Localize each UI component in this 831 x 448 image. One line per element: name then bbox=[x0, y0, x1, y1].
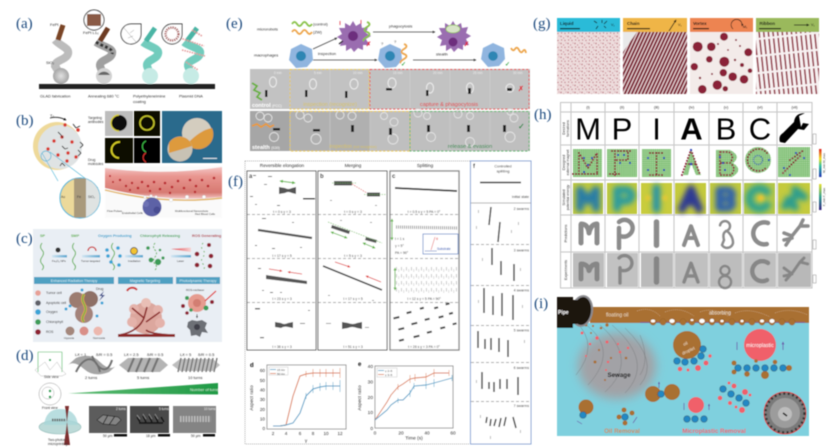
two-photon printing bbox=[39, 406, 81, 446]
helix: 5 turns: δ/R = 0.5 bbox=[147, 352, 164, 357]
chart d: aspect ratio vs gamma: 50 bbox=[260, 378, 265, 383]
chart d: aspect ratio vs gamma: d bbox=[250, 363, 254, 369]
label a: (a) bbox=[16, 16, 33, 32]
top schematic labels: phagocytosis bbox=[389, 24, 412, 28]
subpanel a: reversible elongation: t = 0 s γ = 3 bbox=[273, 210, 291, 214]
row: desired formations: M bbox=[575, 112, 601, 146]
schematic arrows bbox=[313, 32, 476, 60]
chart e: aspect ratio vs time: γ 2–5 bbox=[385, 369, 393, 373]
phagocytic macrophage with control robot bbox=[337, 20, 371, 52]
helix: 5 turns bbox=[119, 352, 168, 380]
panel: (a) helical microrobot fabrication bbox=[16, 10, 215, 104]
panel: (h) programmable swarm patterns table bbox=[534, 102, 826, 288]
subpanel c: splitting: t = 1 s bbox=[395, 237, 405, 241]
top schematic labels bbox=[254, 22, 448, 58]
photodynamic cells: ROS-mic/laser bbox=[186, 288, 204, 292]
blue therapy headers: Enhanced Radiation Therapy bbox=[51, 279, 97, 283]
helix: 2 turns: δ/R = 0.5 bbox=[96, 352, 113, 357]
subpanel c: splitting: γ = 5° bbox=[395, 244, 404, 248]
column headers bbox=[586, 106, 798, 110]
scale bars bbox=[103, 434, 215, 438]
column headers: (vii) bbox=[791, 106, 798, 110]
chain mode: Chain bbox=[627, 21, 640, 26]
absorbing robots row bbox=[640, 319, 805, 325]
sewage pipe: Pipe bbox=[558, 310, 569, 316]
Janus sphere schematic: molecules bbox=[88, 162, 104, 166]
microscopy strip: control: 30 min bbox=[513, 71, 523, 75]
helix: 5 turns: L/t = 2.5 bbox=[124, 352, 139, 357]
liquid mode: V₁ bbox=[611, 23, 615, 27]
row labels: Desired bbox=[562, 122, 566, 135]
radiation tumor cluster: Normoxia bbox=[93, 336, 105, 340]
number of turns wedge: Number of turns bbox=[190, 387, 219, 392]
microscopy strip: stealth bbox=[250, 109, 530, 151]
captions: GLAD fabrication bbox=[40, 94, 70, 98]
column headers: Reversible elongation bbox=[260, 163, 305, 168]
helix: 10 turns: δ/R = 0.5 bbox=[198, 352, 215, 357]
side view diagram bbox=[35, 352, 66, 379]
subpanel f: controlled splitting: Controlled bbox=[494, 164, 512, 168]
label i: (i) bbox=[534, 296, 548, 312]
robot: annealing: FePt L1₀ bbox=[83, 30, 99, 35]
subpanel a: reversible elongation bbox=[247, 171, 316, 350]
microscopy strip: stealth: ✓ bbox=[518, 122, 525, 131]
inspecting macrophage with ZW robot: ✓ bbox=[401, 62, 406, 68]
ribbon mode bbox=[756, 18, 819, 94]
dotted frame bbox=[245, 161, 470, 444]
blood vessel illustration: Multifunctional Nanorobots bbox=[175, 209, 209, 213]
vortex mode: Vortex bbox=[693, 21, 707, 26]
Janus sphere schematic: T₀ bbox=[50, 113, 54, 118]
Janus sphere schematic bbox=[33, 113, 104, 170]
row: predicted swarm shapes bbox=[581, 220, 808, 248]
microscopy strip: control: 5 min bbox=[314, 71, 322, 75]
chart d: aspect ratio vs gamma bbox=[249, 363, 346, 443]
column headers: Merging bbox=[345, 163, 362, 168]
process arrows: Laser bbox=[177, 259, 184, 263]
captions: Polyethyleneimine bbox=[133, 94, 166, 98]
radiation tumor cluster: Hypoxia bbox=[64, 336, 75, 340]
subpanel c: splitting: c bbox=[392, 174, 396, 180]
row labels: formations bbox=[566, 120, 570, 137]
column headers: Splitting bbox=[417, 163, 434, 168]
section captions: Oil Removal bbox=[604, 428, 640, 435]
top row headings bbox=[40, 234, 222, 238]
row labels: external magnet bbox=[566, 150, 570, 175]
blue therapy headers: Photodynamic Therapy bbox=[180, 279, 217, 283]
subpanel f: controlled splitting: 5 swarms bbox=[514, 328, 529, 332]
legend: Apoptotic cell bbox=[46, 301, 66, 305]
chain mode: V₁ bbox=[678, 23, 682, 27]
microrobot waves bbox=[292, 22, 312, 34]
microplastic capture bbox=[732, 329, 792, 379]
zoom circle of layers bbox=[41, 151, 100, 218]
panel: (i) oil and microplastic removal bbox=[534, 295, 809, 436]
microscopy strip: control: 10 min bbox=[353, 71, 363, 75]
chart d: aspect ratio vs gamma: 2 bbox=[272, 431, 275, 436]
macrophage bbox=[289, 44, 313, 68]
zoom circle of layers: SiO₂ bbox=[88, 195, 96, 199]
microscopy strip: stealth: inspection (not recognize) bbox=[329, 144, 377, 150]
chart e: aspect ratio vs time: 60 bbox=[450, 430, 456, 436]
subpanel f: controlled splitting: 7 swarms bbox=[514, 404, 529, 408]
subpanel a: reversible elongation: t = 17 s γ = 5 bbox=[272, 254, 292, 258]
microscopy strip: control bbox=[250, 69, 530, 109]
top schematic labels: macrophages bbox=[254, 52, 278, 58]
subpanel f: controlled splitting bbox=[470, 161, 531, 444]
chart d: aspect ratio vs gamma: 60 bbox=[260, 368, 265, 373]
process arrows: Irradiation bbox=[128, 259, 141, 263]
subpanel f: controlled splitting: f bbox=[473, 164, 476, 170]
subpanel b: merging: b bbox=[320, 174, 324, 180]
photodynamic cells bbox=[181, 288, 216, 337]
ribbon mode: V₁ bbox=[811, 23, 815, 27]
subpanel f: controlled splitting: 3 swarms bbox=[514, 248, 529, 252]
chart e: aspect ratio vs time: 0 bbox=[370, 426, 373, 432]
engulfed robot macrophage: ✗ bbox=[464, 41, 469, 48]
helix: 2 turns: 2 turns bbox=[85, 375, 97, 380]
helix: 2 turns: L/t = 1 bbox=[75, 352, 87, 357]
two-photon printing: Two-photon bbox=[48, 438, 66, 442]
column headers: (v) bbox=[724, 106, 729, 110]
blue therapy headers bbox=[34, 277, 220, 284]
inspecting macrophage with ZW robot: ? bbox=[394, 39, 397, 44]
legend: Tumor cell bbox=[46, 291, 62, 295]
row labels: Simulated bbox=[562, 190, 566, 205]
chart e: aspect ratio vs time: γ 3–5 bbox=[385, 373, 393, 377]
sewage pipe bbox=[557, 295, 594, 328]
chart d: aspect ratio vs gamma: 12 bbox=[337, 431, 343, 436]
column headers bbox=[260, 163, 434, 168]
chart e: aspect ratio vs time: Time (s) bbox=[405, 436, 423, 442]
subpanel c: splitting: PA = 90° bbox=[395, 251, 409, 255]
chart d: aspect ratio vs gamma: 10 bbox=[260, 416, 265, 422]
chart e: aspect ratio vs time: 0 bbox=[374, 430, 377, 436]
blood vessel illustration: Endothelial Cells bbox=[122, 211, 143, 215]
scale bars: 50 μm bbox=[103, 434, 113, 438]
vortex mode bbox=[690, 18, 753, 94]
chart e: aspect ratio vs time: 30 bbox=[368, 380, 373, 386]
top row headings: Chlorophyll Releasing bbox=[140, 234, 181, 238]
subpanel f: controlled splitting: 6 swarms bbox=[514, 366, 529, 370]
chart d: aspect ratio vs gamma: 30 bbox=[260, 397, 265, 402]
helix: 2 turns bbox=[68, 352, 117, 380]
blue therapy headers: Magnetic Targeting bbox=[130, 279, 160, 283]
chart d: aspect ratio vs gamma: 8 bbox=[312, 431, 315, 436]
chart e: aspect ratio vs time: 10 bbox=[368, 410, 373, 416]
subpanel a: reversible elongation: t = 23 s γ = 3 bbox=[272, 297, 292, 301]
number of turns wedge bbox=[68, 383, 219, 394]
row: desired formations: B bbox=[716, 112, 736, 146]
label h: (h) bbox=[534, 107, 552, 123]
panel: (d) helical swimmers with varied turns bbox=[16, 348, 220, 446]
top row headings: ROS Generating bbox=[192, 234, 222, 238]
SEM of Janus spheres bbox=[162, 111, 222, 163]
label d: (d) bbox=[16, 348, 34, 364]
chart d: aspect ratio vs gamma: 15 Hz bbox=[277, 368, 285, 372]
oil droplet capture bbox=[673, 331, 712, 372]
process arrows: Tumor-targeted bbox=[81, 259, 101, 263]
robot: plasmid DNA bbox=[162, 24, 205, 84]
chart d: aspect ratio vs gamma: 6 bbox=[299, 431, 302, 436]
oil droplet capture: oil bbox=[682, 340, 688, 347]
row labels: Designed bbox=[562, 155, 566, 170]
helix: 10 turns bbox=[172, 352, 220, 380]
microscopy strip: control: ✗ bbox=[518, 85, 524, 93]
row: desired formations: I bbox=[652, 112, 661, 146]
chain mode bbox=[623, 18, 687, 94]
panel: (b) Janus particle drug delivery bbox=[16, 111, 222, 218]
released macrophage: ✓ bbox=[505, 62, 510, 68]
chart e: aspect ratio vs time bbox=[357, 362, 456, 442]
subpanel f: controlled splitting: splitting bbox=[497, 170, 509, 174]
captions: coating bbox=[133, 99, 146, 104]
liquid mode bbox=[557, 18, 620, 94]
row labels: potential energy bbox=[566, 185, 570, 210]
row: simulated potential energy bbox=[573, 183, 810, 214]
captions: Annealing 680 °C bbox=[88, 94, 119, 98]
subpanel f: controlled splitting: initial state bbox=[512, 195, 529, 199]
blood vessel illustration: Flow Pulses bbox=[107, 209, 123, 213]
label e: (e) bbox=[226, 16, 243, 32]
row: desired formations: C bbox=[749, 112, 771, 146]
Janus sphere schematic: Targeting bbox=[88, 116, 102, 120]
panel: (f) swarm reconfiguration bbox=[228, 161, 531, 444]
phagocytic macrophage with control robot: ✗ bbox=[366, 41, 371, 48]
scale bars: 50 μm bbox=[191, 434, 201, 438]
section captions bbox=[604, 428, 746, 435]
label g: (g) bbox=[533, 16, 550, 32]
microscopy strip: control: 0 min bbox=[274, 71, 282, 75]
column headers: (iv) bbox=[689, 106, 695, 110]
top schematic labels: inspection bbox=[318, 51, 336, 56]
engulfed robot macrophage bbox=[437, 21, 471, 52]
two-photon printing: microprinting bbox=[48, 442, 68, 446]
radiation tumor cluster: Drug bbox=[96, 287, 103, 291]
top schematic labels: (ZW) bbox=[313, 30, 323, 34]
floating oil band: floating oil bbox=[606, 312, 629, 318]
SEM images bbox=[89, 406, 216, 433]
inspecting macrophage with ZW robot: ? bbox=[381, 41, 384, 46]
inspecting macrophage with ZW robot bbox=[378, 39, 406, 68]
SEM inset bbox=[764, 392, 806, 434]
sewage plume bbox=[576, 322, 656, 399]
subpanel c: splitting: t = 12 s γ = 5 PA = 90° bbox=[407, 297, 441, 301]
chart e: aspect ratio vs time: 20 bbox=[368, 395, 373, 401]
column headers: (iii) bbox=[654, 106, 660, 110]
helix: 10 turns: 10 turns bbox=[188, 375, 202, 380]
subpanel f: controlled splitting: 2 swarms bbox=[514, 207, 529, 211]
chart d: aspect ratio vs gamma: 20 bbox=[260, 407, 265, 412]
subpanel a: reversible elongation: t = 36 s γ = 3 bbox=[272, 345, 292, 349]
process arrows: Fe₃O₄ NPs bbox=[52, 259, 66, 263]
water background bbox=[557, 323, 809, 436]
microscopy strip: control: 15 min bbox=[393, 71, 403, 75]
process arrows bbox=[52, 247, 191, 263]
sewage plume: Sewage bbox=[607, 372, 631, 379]
chart d: aspect ratio vs gamma: 40 bbox=[260, 388, 265, 392]
microscopy strip: stealth: stealth (S30) bbox=[252, 145, 280, 151]
side view diagram: Side view bbox=[44, 375, 59, 379]
table grid bbox=[560, 102, 812, 288]
row: designed magnet arrays bbox=[573, 147, 810, 177]
panel: (g) magnetic collective modes bbox=[533, 16, 819, 94]
chart e: aspect ratio vs time: 20 bbox=[398, 430, 404, 436]
panel: (e) macrophage stealth microrobots bbox=[226, 16, 530, 151]
subpanel c: splitting: t = 0.5 s γ = 5 PA = 0° bbox=[408, 210, 441, 214]
floating oil band: absorbing bbox=[709, 310, 731, 316]
chart e: aspect ratio vs time: e bbox=[358, 362, 362, 368]
top row headings: SMP bbox=[71, 234, 80, 238]
SEM images: 5 turns bbox=[159, 407, 169, 411]
legend: ROS bbox=[46, 330, 54, 334]
column headers: (i) bbox=[586, 106, 590, 110]
top schematic labels: (control) bbox=[313, 22, 328, 26]
row: desired formations bbox=[575, 112, 809, 146]
legend bbox=[35, 290, 66, 335]
subpanel b: merging bbox=[318, 171, 387, 350]
subpanel c: splitting: θ bbox=[436, 237, 438, 241]
oxygen, chlorophyll and ROS dots bbox=[105, 243, 213, 268]
chart d: aspect ratio vs gamma: γ bbox=[305, 438, 308, 443]
legend: Chlorophyll bbox=[46, 320, 63, 324]
subpanel c: splitting: Substrate bbox=[437, 247, 451, 251]
subpanel b: merging: t = 51 s γ = 3 bbox=[343, 345, 363, 349]
robot: GLAD fabrication bbox=[46, 22, 69, 84]
microscopy strip: control: capture & phagocytosis bbox=[420, 102, 478, 108]
robot: GLAD fabrication: FePt bbox=[50, 22, 59, 27]
microscopy strip: stealth: release & evasion bbox=[448, 144, 492, 150]
subpanel b: merging: t = 17 s γ = 5 bbox=[343, 297, 363, 301]
robot: GLAD fabrication: SiO₂ bbox=[46, 60, 55, 65]
fluorescence images bbox=[105, 111, 160, 163]
subpanel c: splitting: t = 26 s γ = 3 PA = 0° bbox=[408, 345, 441, 349]
label c: (c) bbox=[16, 231, 33, 247]
column headers: (vi) bbox=[757, 106, 763, 110]
vortex mode: M₁ bbox=[743, 25, 748, 29]
chart e: aspect ratio vs time: 40 bbox=[368, 364, 373, 370]
row labels: Experiments bbox=[564, 260, 568, 280]
chart d: aspect ratio vs gamma: 4 bbox=[285, 431, 288, 436]
chart e: aspect ratio vs time: 40 bbox=[424, 430, 430, 436]
chart d: aspect ratio vs gamma: 0 bbox=[262, 426, 265, 431]
captions bbox=[40, 94, 203, 104]
row: experimental swarm shapes bbox=[573, 253, 811, 288]
chart d: aspect ratio vs gamma: 50 Hz bbox=[277, 372, 285, 376]
side scale bars and colorbars bbox=[813, 134, 826, 283]
subpanel b: merging: t = 0 s γ = 3 bbox=[344, 210, 362, 214]
substrate bar bbox=[39, 84, 215, 89]
microscopy strip: control: inspection (recognize) bbox=[303, 102, 357, 108]
row: desired formations: P bbox=[612, 112, 632, 146]
label f: (f) bbox=[228, 174, 243, 190]
oil droplet capture: droplet bbox=[681, 345, 696, 356]
blood vessel illustration: Red Blood Cells bbox=[195, 212, 216, 216]
spirulina stages bbox=[40, 243, 204, 270]
subpanel f: controlled splitting: 4 swarms bbox=[514, 288, 529, 292]
panel: (c) chlorophyll nanoparticle therapy bbox=[16, 229, 222, 342]
SEM images: 2 turns bbox=[116, 407, 126, 411]
helix: 5 turns: 5 turns bbox=[137, 375, 149, 380]
side scale bars and colorbars: M_min M_max bbox=[822, 153, 826, 173]
chart d: aspect ratio vs gamma: 10 bbox=[323, 431, 329, 436]
top row headings: SP bbox=[40, 234, 46, 238]
microscopy strip: control: control (FCC) bbox=[252, 103, 282, 109]
microscopy strip: control: 25 min bbox=[473, 71, 483, 75]
top schematic labels: stealth bbox=[436, 52, 448, 56]
front view diagram: Front view bbox=[42, 406, 58, 410]
robot: polyethyleneimine coating bbox=[121, 24, 158, 84]
subpanel b: merging: t = 5 s γ = 3 bbox=[344, 254, 362, 258]
floating oil band bbox=[590, 307, 809, 323]
row: desired formations: A bbox=[680, 112, 703, 146]
row labels bbox=[562, 120, 570, 280]
ribbon mode: Ribbon bbox=[760, 21, 775, 26]
Janus sphere schematic: antibodies bbox=[88, 120, 104, 124]
blood vessel illustration bbox=[105, 166, 222, 218]
liquid mode: Liquid bbox=[560, 21, 574, 26]
captions: Plasmid DNA bbox=[179, 94, 203, 98]
label b: (b) bbox=[16, 113, 34, 129]
robot: annealing bbox=[83, 10, 112, 84]
Janus sphere schematic: Drug bbox=[88, 158, 95, 162]
released macrophage bbox=[481, 43, 526, 68]
magnetic targeting tumor tree bbox=[118, 288, 175, 337]
radiation tumor cluster bbox=[64, 287, 105, 340]
top schematic labels: microrobots bbox=[257, 26, 278, 32]
scale bars: 18 μm bbox=[146, 434, 156, 438]
zoom circle of layers: Fe bbox=[77, 195, 81, 199]
chart d: aspect ratio vs gamma: Aspect ratio bbox=[249, 385, 255, 411]
subpanel a: reversible elongation: a bbox=[249, 174, 253, 180]
subpanel c: splitting bbox=[390, 171, 459, 350]
microscopy strip: control: 20 min bbox=[433, 71, 443, 75]
microplastic removal examples bbox=[684, 382, 752, 422]
helix: 10 turns: L/t = 5 bbox=[180, 352, 192, 357]
SEM images: 10 turns bbox=[204, 407, 216, 411]
oil removal examples bbox=[577, 382, 680, 426]
chart e: aspect ratio vs time: Aspect ratio bbox=[357, 385, 363, 411]
section captions: Microplastic Removal bbox=[682, 428, 746, 435]
zoom circle of layers: Au bbox=[61, 195, 65, 199]
top row headings: Oxygen Producing bbox=[98, 234, 132, 238]
side scale bars and colorbars: F_min F_max bbox=[822, 187, 826, 206]
legend: Oxygen bbox=[46, 310, 58, 314]
front view diagram bbox=[39, 383, 61, 410]
microplastic capture: microplastic bbox=[746, 343, 774, 349]
column headers: (ii) bbox=[620, 106, 625, 110]
row labels: Predictions bbox=[564, 224, 568, 242]
